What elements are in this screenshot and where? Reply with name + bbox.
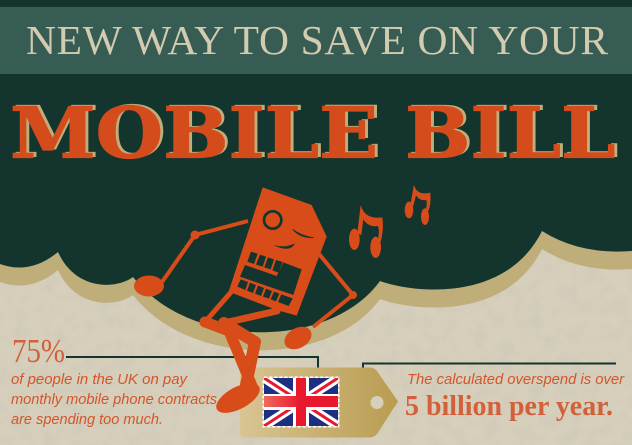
gold scalloped band — [0, 18, 632, 350]
left arm — [162, 221, 248, 282]
music note large — [349, 205, 383, 258]
luggage tag — [240, 368, 398, 438]
left foot — [212, 377, 264, 419]
knee right — [218, 318, 230, 328]
sim contacts — [237, 252, 302, 306]
left hand — [134, 276, 164, 296]
right arm — [313, 254, 353, 327]
right elbow — [349, 291, 357, 299]
title: new way to save on your: NEW WAY TO SAVE ON YOUR — [26, 17, 608, 63]
smile — [273, 243, 295, 249]
stat: 75%: 75% — [12, 333, 65, 370]
knee left — [200, 316, 210, 328]
left elbow — [190, 230, 200, 240]
leader line right — [363, 364, 616, 369]
tag body — [240, 368, 398, 438]
music note small — [405, 185, 431, 225]
stat description: of people in the UK on pay — [11, 371, 188, 388]
leader line left — [66, 357, 318, 369]
legs — [205, 291, 277, 386]
stat description — [11, 371, 217, 428]
stat description: are spending too much. — [11, 411, 163, 428]
overspend figure: 5 billion per year. — [405, 390, 613, 422]
title: mobile bill: MOBILE BILL — [10, 93, 615, 175]
heading band — [0, 7, 632, 74]
eye — [264, 211, 281, 229]
card body — [229, 187, 327, 316]
title: mobile bill: MOBILE BILL — [13, 92, 618, 174]
sim card body and face — [229, 187, 327, 316]
wink — [293, 229, 314, 238]
dark green scalloped header — [0, 0, 632, 332]
stat description: monthly mobile phone contracts — [11, 391, 217, 408]
tag hole — [370, 396, 384, 409]
union jack stamp — [262, 376, 340, 428]
overspend text: The calculated overspend is over — [407, 371, 625, 388]
right hand — [280, 322, 316, 354]
robot sim card character — [134, 187, 357, 419]
